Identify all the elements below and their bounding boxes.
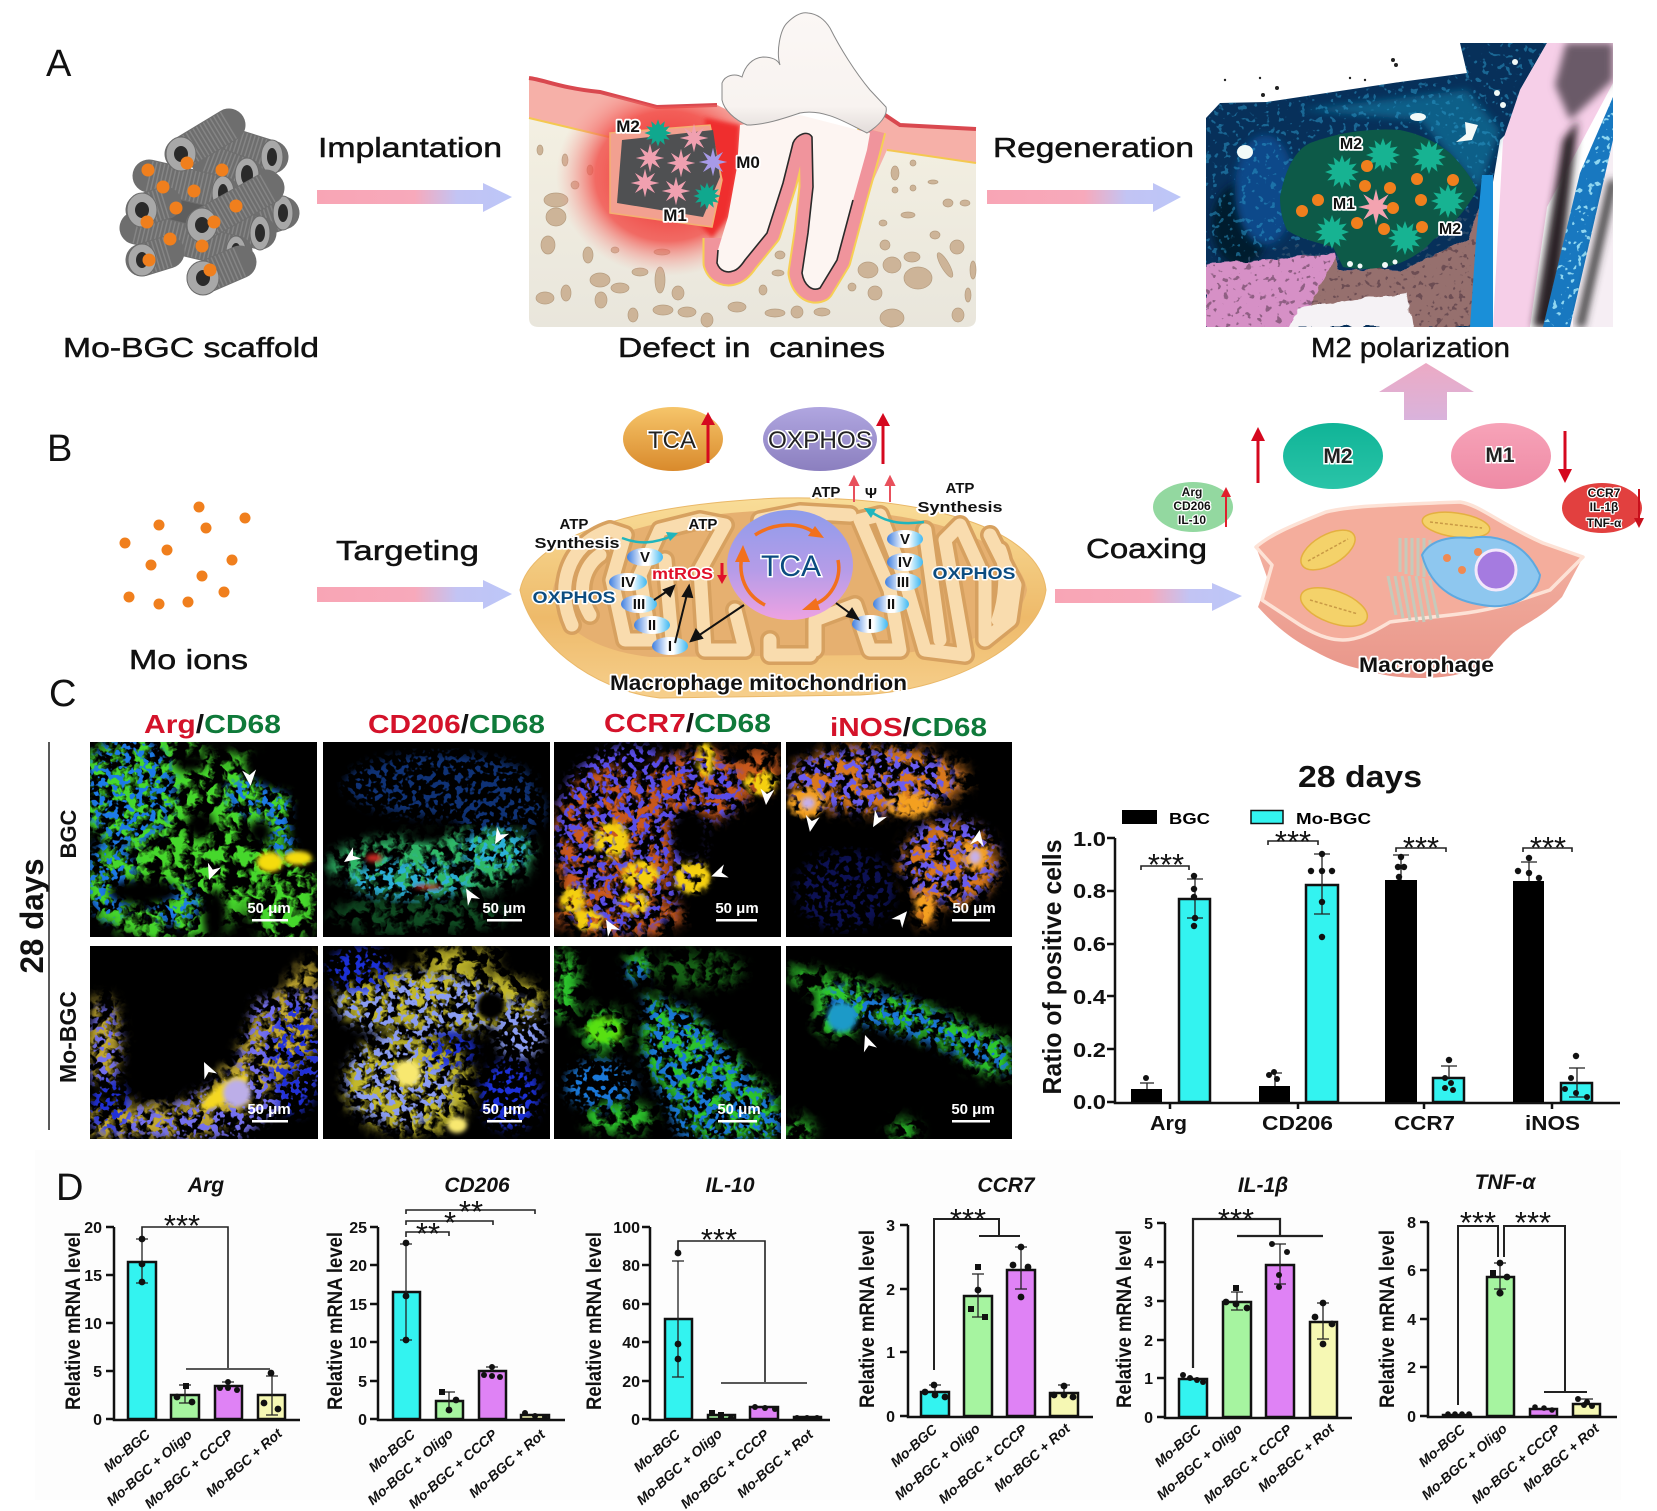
label: Regeneration: Regeneration (993, 132, 1194, 163)
heading: iNOS/CD68: iNOS /CD68 (830, 712, 987, 742)
tick labels (613, 1220, 640, 1429)
label: Defect in canines: Defect in canines (618, 332, 885, 363)
y axis title: Relative mRNA level (856, 1230, 879, 1408)
OXPHOS ellipse (763, 407, 890, 471)
arrow: targeting (317, 580, 512, 609)
title: IL-10 (705, 1174, 755, 1197)
right white edge (1565, 120, 1613, 327)
micrograph: CD206 Mo-BGC: 50 μm (482, 1101, 526, 1118)
M2 markers ellipse (1153, 482, 1233, 532)
micrograph: CD206 Mo-BGC (323, 946, 550, 1139)
gum right (860, 112, 976, 210)
right complexes: I (868, 616, 872, 633)
chart: CCR7 mRNA (856, 1174, 1093, 1506)
stars: *** (164, 1208, 200, 1243)
panel C rotated label: 28 days: 28 days (14, 858, 50, 974)
tick labels: 6 (1407, 1263, 1416, 1280)
cell body (1256, 502, 1583, 678)
tick labels: 2 (886, 1282, 895, 1299)
ATP Synthesis left: Synthesis (534, 535, 620, 552)
chart title: 28 days (1298, 759, 1422, 794)
x tick labels: iNOS (1525, 1113, 1580, 1135)
histology labels (1333, 136, 1461, 238)
bone (529, 110, 976, 327)
icon: Mo-BGC scaffold tubes (127, 125, 293, 295)
tick labels: 100 (613, 1220, 640, 1237)
tick labels: 20 (622, 1374, 640, 1391)
bars (128, 1262, 285, 1419)
cell labels: M0 (736, 153, 760, 172)
bars (393, 1292, 549, 1419)
tick labels: 10 (349, 1335, 367, 1352)
y axis title: Relative mRNA level (324, 1232, 347, 1410)
error bars and points (400, 1240, 548, 1420)
pale pink periodontal column (1493, 43, 1613, 327)
tick labels: 5 (358, 1374, 367, 1391)
y axis title: Relative mRNA level (1113, 1230, 1136, 1408)
OXPHOS right label: OXPHOS (932, 564, 1016, 583)
stars: * (444, 1205, 456, 1240)
error bars and points (1180, 1241, 1335, 1385)
M1 markers ellipse: CCR7 (1588, 486, 1621, 500)
axes (1420, 1222, 1617, 1417)
white lacunae (1237, 59, 1518, 281)
stars: *** (701, 1222, 737, 1257)
left complexes: II (648, 617, 656, 634)
x tick labels: CCR7 (1394, 1113, 1455, 1135)
cell labels (616, 117, 760, 225)
icon: Mo ions (120, 502, 250, 610)
heading: CCR7/CD68: CCR7 /CD68 (604, 708, 771, 738)
label: Targeting: Targeting (336, 535, 479, 566)
stars: ** (459, 1194, 483, 1229)
y axis title: Relative mRNA level (1376, 1230, 1399, 1408)
panel letter A: A (46, 43, 72, 85)
x labels (887, 1419, 1074, 1506)
micrograph: CCR7 BGC (554, 742, 781, 937)
histology labels: M1 (1333, 196, 1355, 213)
chart: Arg mRNA (62, 1174, 300, 1511)
y axis title: Relative mRNA level (62, 1232, 85, 1410)
blue vertical strip (1470, 175, 1493, 327)
significance bracket (1193, 1219, 1323, 1368)
mtROS label (652, 563, 727, 584)
x labels: Mo-BGC + Oligo (1418, 1420, 1510, 1503)
M2 markers ellipse: CD206 (1173, 499, 1211, 513)
mitochondria inner folds (1308, 522, 1482, 614)
M2 markers ellipse: Arg (1182, 485, 1202, 499)
panel letter D: D (56, 1167, 83, 1209)
Golgi stacks (1388, 538, 1438, 622)
TCA sphere cycle arrows (741, 525, 839, 605)
x labels (364, 1425, 549, 1511)
stars (1460, 1205, 1551, 1240)
tick labels: 0 (358, 1412, 367, 1429)
dark blue tissue (1206, 43, 1547, 327)
right complexes: V (900, 531, 910, 548)
heading: CD206/CD68: CD206 /CD68 (368, 709, 545, 739)
micrograph: iNOS Mo-BGC (786, 946, 1012, 1139)
ATP Synthesis left: ATP (689, 516, 717, 533)
x labels: Mo-BGC + CCCP (677, 1426, 772, 1511)
divider line (48, 742, 50, 1130)
micrograph: Arg BGC: 50 μm (247, 900, 291, 917)
error bars and points (922, 1244, 1076, 1400)
label: Implantation: Implantation (318, 132, 502, 163)
tick labels: 5 (93, 1364, 102, 1381)
x labels: Mo-BGC + CCCP (1468, 1421, 1563, 1506)
x labels: Mo-BGC + CCCP (1200, 1421, 1295, 1506)
micrograph: Arg Mo-BGC (90, 946, 318, 1139)
tick labels (84, 1220, 102, 1429)
tick labels: 2 (1407, 1360, 1416, 1377)
significance stars (1148, 824, 1566, 882)
x labels: Mo-BGC + Oligo (1153, 1420, 1245, 1503)
x labels (630, 1425, 817, 1511)
x labels: Mo-BGC + Oligo (633, 1425, 725, 1508)
micrograph: Arg Mo-BGC: 50 μm (247, 1101, 291, 1118)
label: Mo ions: Mo ions (129, 644, 248, 675)
tick labels (349, 1220, 367, 1429)
significance bracket (934, 1219, 1020, 1370)
cycle arrowheads (735, 526, 824, 610)
tick labels: 15 (84, 1268, 102, 1285)
y tick labels: 1.0 (1073, 829, 1106, 851)
micrograph: iNOS Mo-BGC: 50 μm (951, 1101, 995, 1118)
tooth roots (717, 115, 870, 289)
y tick labels (1073, 829, 1107, 1114)
x labels: Mo-BGC + CCCP (935, 1421, 1030, 1506)
inflamed red zone (560, 96, 744, 272)
significance bracket (678, 1241, 807, 1383)
tick labels: 20 (84, 1220, 102, 1237)
y axis title: Relative mRNA level (583, 1232, 606, 1410)
tick labels: 60 (622, 1297, 640, 1314)
left complexes (609, 548, 688, 655)
left complexes: V (640, 549, 650, 566)
M2 ellipse (1283, 423, 1383, 489)
tick labels: 3 (1144, 1294, 1153, 1311)
x labels: Mo-BGC (887, 1421, 941, 1470)
tick labels: 4 (1407, 1312, 1416, 1329)
histology labels: M2 (1340, 136, 1362, 153)
illustration: macrophage cell (1256, 502, 1583, 678)
chart: CD206 mRNA (324, 1174, 565, 1511)
y tick labels: 0.0 (1073, 1092, 1106, 1114)
cristae (565, 512, 1015, 655)
x labels: Mo-BGC + Rot (1520, 1419, 1603, 1495)
x labels: Mo-BGC + Oligo (891, 1420, 983, 1503)
ATP Synthesis right: ATP (946, 480, 974, 497)
tick labels: 8 (1407, 1215, 1416, 1232)
M1 markers ellipse: IL-1β (1590, 500, 1618, 514)
label: Macrophage mitochondrion: Macrophage mitochondrion (610, 672, 907, 695)
matrix (553, 510, 1027, 657)
bars (921, 1270, 1078, 1416)
mitochondria organelles (1295, 508, 1491, 634)
significance stars: *** (1148, 847, 1184, 882)
significance brackets (1458, 1226, 1587, 1405)
legend: BGC (1169, 811, 1211, 828)
heading: Arg/CD68: Arg /CD68 (144, 709, 281, 739)
tick labels: 0 (93, 1412, 102, 1429)
significance stars: *** (1403, 830, 1439, 865)
tick labels: 5 (1144, 1216, 1153, 1233)
red up arrow M2 (1251, 427, 1265, 483)
arrow: implantation (317, 183, 512, 212)
tick labels: 10 (84, 1316, 102, 1333)
bone pores (536, 145, 976, 327)
tick labels (886, 1218, 895, 1426)
x labels: Mo-BGC (100, 1426, 154, 1475)
left complexes: III (633, 596, 645, 613)
x labels: Mo-BGC + Rot (1255, 1419, 1338, 1495)
TCA ellipse (623, 407, 723, 471)
x labels: Mo-BGC + CCCP (405, 1426, 500, 1511)
chart: TNF-alpha mRNA (1376, 1171, 1617, 1506)
stars: ** (416, 1216, 440, 1251)
teal speckle texture (1206, 43, 1547, 327)
error bars and points (672, 1250, 820, 1421)
y tick labels: 0.2 (1073, 1040, 1106, 1062)
x labels: Mo-BGC + Rot (466, 1425, 549, 1501)
endoplasmic reticulum (1422, 537, 1540, 606)
bars (1443, 1277, 1600, 1416)
right complexes: II (887, 596, 895, 613)
tick labels: 0 (1407, 1409, 1416, 1426)
M2 markers ellipse: IL-10 (1178, 513, 1206, 527)
right complexes: III (897, 574, 909, 591)
arrow: coaxing (1055, 583, 1242, 611)
error bars and points (1445, 1260, 1595, 1417)
title: TNF-α (1475, 1171, 1536, 1194)
stars: *** (1515, 1205, 1551, 1240)
row label: Mo-BGC: Mo-BGC (55, 991, 81, 1083)
ATP Synthesis right (812, 480, 1002, 516)
x labels: Mo-BGC + Rot (991, 1419, 1074, 1495)
micrograph: Arg BGC (90, 742, 317, 937)
tick labels (1407, 1215, 1416, 1426)
tick labels: 20 (349, 1258, 367, 1275)
right blue strip (1543, 97, 1613, 327)
cell labels: M2 (616, 117, 640, 136)
outer membrane (520, 498, 1046, 698)
x labels (100, 1424, 286, 1511)
micrograph: CD206 BGC (323, 742, 550, 937)
axes (1157, 1223, 1352, 1418)
significance stars: *** (1275, 824, 1311, 859)
y tick labels: 0.4 (1073, 987, 1107, 1009)
tooth crown (722, 13, 886, 133)
y tick labels: 0.6 (1073, 934, 1106, 956)
left complexes: I (668, 638, 672, 655)
x labels: Mo-BGC (1415, 1421, 1469, 1470)
label: M2 polarization: M2 polarization (1311, 332, 1510, 363)
x labels: Mo-BGC + Oligo (364, 1425, 456, 1508)
row label: BGC: BGC (56, 809, 81, 858)
ATP Synthesis right: Synthesis (918, 499, 1002, 516)
arrow: big up arrow to M2 polarization (1379, 363, 1474, 420)
defect scaffold block (610, 125, 722, 227)
stars: *** (950, 1202, 986, 1237)
bars (1131, 880, 1592, 1102)
x labels: Mo-BGC (365, 1426, 419, 1475)
M1 markers ellipse (1562, 483, 1644, 533)
arrow: regeneration (987, 183, 1181, 212)
axes (370, 1227, 565, 1420)
label: Macrophage: Macrophage (1359, 654, 1494, 677)
x tick labels: CD206 (1262, 1113, 1333, 1135)
panel letter C: C (49, 673, 76, 715)
title: IL-1β (1238, 1174, 1288, 1197)
left complexes: IV (621, 574, 635, 591)
tick labels: 15 (349, 1297, 367, 1314)
stars (416, 1194, 483, 1251)
M1 markers ellipse: TNF-α (1587, 516, 1622, 530)
stars: *** (1218, 1202, 1254, 1237)
micrograph: CD206 BGC: 50 μm (482, 900, 526, 917)
x tick labels (1150, 1113, 1580, 1135)
x tick labels: Arg (1150, 1113, 1187, 1135)
panel letter B: B (47, 428, 72, 470)
chart: IL-1beta mRNA (1113, 1174, 1352, 1506)
cell labels: M1 (663, 206, 687, 225)
ATP Synthesis left: ATP (560, 516, 588, 533)
error bars (1140, 854, 1585, 1097)
micrograph: iNOS BGC (786, 742, 1012, 937)
legend (1122, 810, 1372, 828)
y axis title: Ratio of positive cells (1037, 840, 1067, 1094)
tick labels: 3 (886, 1218, 895, 1235)
teal arrow right (864, 508, 924, 523)
axes (106, 1227, 300, 1420)
micrograph: iNOS BGC: 50 μm (952, 900, 996, 917)
micrograph: CCR7 Mo-BGC: 50 μm (717, 1101, 761, 1118)
micrograph: CCR7 BGC: 50 μm (715, 900, 759, 917)
green scaffold zone (1280, 130, 1477, 269)
histology labels: M2 (1439, 221, 1461, 238)
bars (665, 1319, 821, 1419)
x labels (1415, 1419, 1603, 1506)
chart: IL-10 mRNA (583, 1174, 830, 1511)
axes (642, 1227, 830, 1420)
significance stars: *** (1530, 830, 1566, 865)
ATP Synthesis right: Ψ (865, 485, 877, 502)
tick labels: 4 (1144, 1255, 1153, 1272)
chart: ratio of positive cells, 28 days (1037, 759, 1620, 1135)
histology image (1206, 43, 1613, 327)
tick labels: 1 (886, 1345, 895, 1362)
error bars and points (136, 1236, 281, 1415)
x labels: Mo-BGC + CCCP (141, 1426, 236, 1511)
tick labels: 80 (622, 1258, 640, 1275)
TCA sphere label: TCA (761, 550, 821, 583)
OXPHOS left label: OXPHOS (532, 588, 616, 607)
label: Mo-BGC scaffold: Mo-BGC scaffold (63, 332, 319, 363)
title: Arg (187, 1174, 224, 1197)
right complexes: IV (898, 554, 912, 571)
tick labels (1144, 1216, 1153, 1427)
Mo particles (1296, 160, 1459, 235)
M2 ellipse: M2 (1323, 445, 1353, 468)
cell top face (1256, 502, 1583, 640)
TCA ellipse: TCA (648, 427, 696, 454)
root periodontal bands (717, 130, 872, 289)
tick labels: 25 (349, 1220, 367, 1237)
red down arrow M1 (1558, 431, 1572, 483)
cells in defect (631, 119, 727, 210)
tick labels: 40 (622, 1335, 640, 1352)
teal arrow left (622, 532, 678, 542)
x labels (1151, 1419, 1338, 1506)
nucleus (1476, 550, 1516, 590)
illustration: macrophage mitochondrion (520, 477, 1046, 698)
black pathway arrows (654, 586, 858, 643)
ATP and psi red arrows (850, 477, 894, 502)
M2 cells (1315, 138, 1465, 255)
illustration: tooth defect in canines (529, 13, 976, 327)
data points (1143, 851, 1590, 1100)
x labels: Mo-BGC + Rot (203, 1424, 286, 1500)
title: CD206 (444, 1174, 510, 1197)
panel D background (35, 1150, 1621, 1500)
pink tissue bottom (1206, 207, 1485, 327)
x labels: Mo-BGC + Rot (734, 1425, 817, 1501)
ATP Synthesis left (534, 516, 717, 552)
significance brackets (406, 1210, 535, 1237)
ATP Synthesis right: ATP (812, 484, 840, 501)
M1 ellipse: M1 (1485, 444, 1515, 467)
title: CCR7 (977, 1174, 1036, 1197)
tick labels: 0 (1144, 1410, 1153, 1427)
OXPHOS ellipse: OXPHOS (768, 427, 872, 454)
label: Coaxing: Coaxing (1086, 533, 1207, 564)
x labels: Mo-BGC + Oligo (103, 1426, 195, 1509)
axes and ticks (1107, 838, 1620, 1109)
mtROS label: mtROS (652, 566, 713, 583)
micrograph: CCR7 Mo-BGC (554, 946, 781, 1139)
tick labels: 0 (631, 1412, 640, 1429)
x labels: Mo-BGC (1151, 1421, 1205, 1470)
significance brackets (1141, 841, 1572, 870)
M1 ellipse (1451, 423, 1551, 489)
M1 cell (1358, 189, 1394, 225)
right complexes (852, 530, 923, 633)
orange vesicles (1443, 548, 1482, 574)
bars (1179, 1265, 1337, 1417)
gum left (529, 77, 745, 220)
black speckles on white (1224, 58, 1398, 97)
axes (900, 1225, 1093, 1417)
tick labels: 0 (886, 1409, 895, 1426)
x labels: Mo-BGC (630, 1426, 684, 1475)
tick labels: 1 (1144, 1371, 1153, 1388)
tick labels: 2 (1144, 1333, 1153, 1350)
TCA sphere (727, 510, 853, 620)
stars: *** (1460, 1205, 1496, 1240)
significance bracket (142, 1227, 270, 1369)
legend: Mo-BGC (1296, 811, 1372, 828)
y tick labels: 0.8 (1073, 881, 1106, 903)
